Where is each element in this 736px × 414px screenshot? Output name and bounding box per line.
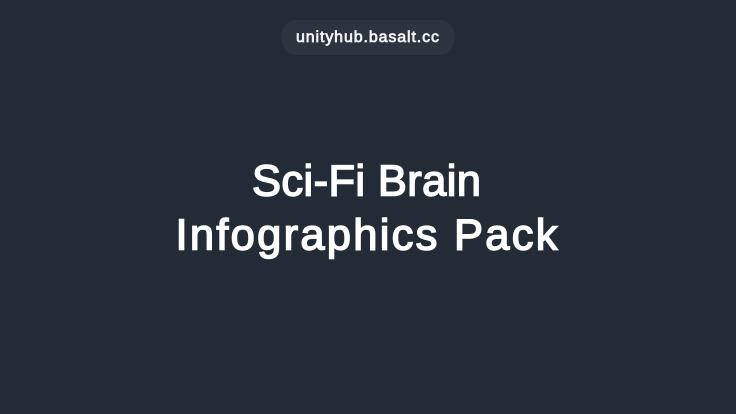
title: Sci-Fi Brain [252,158,481,206]
title: Infographics Pack [176,212,558,260]
site badge: unityhub.basalt.cc [296,29,439,46]
title [176,158,558,260]
site badge [282,20,454,55]
